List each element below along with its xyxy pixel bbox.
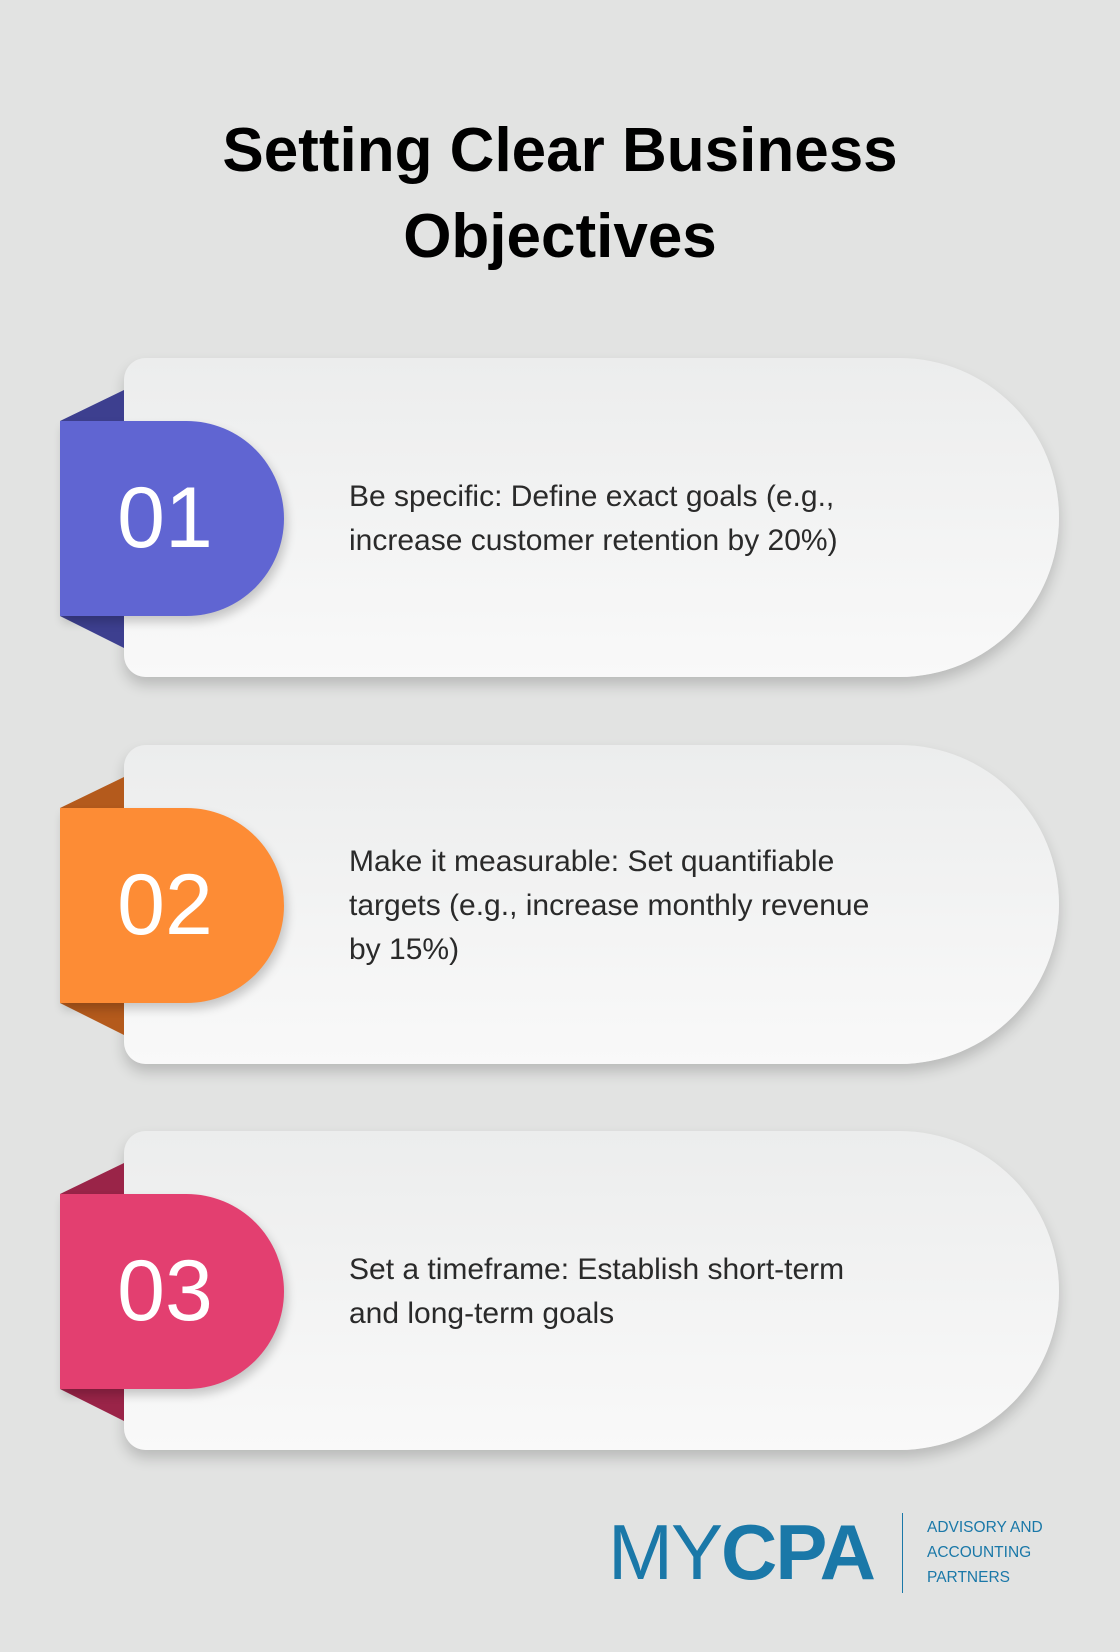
- logo: ACCOUNTING: [927, 1544, 1031, 1561]
- logo: [608, 1508, 1043, 1596]
- badge 02: 02: [117, 857, 213, 953]
- panel: item 1: [59, 358, 1064, 690]
- badge 02: [60, 808, 284, 1003]
- fold 1: [60, 390, 124, 648]
- title: Objectives: [403, 202, 717, 271]
- card 3: [124, 1131, 1059, 1450]
- badge 01: [60, 421, 284, 616]
- fold 2: [60, 777, 124, 1035]
- title: Setting Clear Business: [222, 116, 898, 185]
- panel: item 2: [59, 745, 1064, 1078]
- logo: PARTNERS: [927, 1569, 1010, 1586]
- card 2: [124, 745, 1059, 1064]
- text 1: Be specific: Define exact goals (e.g., increase customer retention by 20%): [349, 480, 838, 557]
- text 3: Set a timeframe: Establish short-term and long-term goals: [349, 1253, 844, 1330]
- title: [222, 116, 898, 271]
- card 1: [124, 358, 1059, 677]
- panel: item 3: [59, 1131, 1064, 1464]
- text 2: Make it measurable: Set quantifiable targets (e.g., increase monthly revenue by 15%): [349, 845, 869, 966]
- badge 03: [60, 1194, 284, 1389]
- badge 01: 01: [117, 470, 213, 566]
- badge 03: 03: [117, 1243, 213, 1339]
- logo: MYCPA: [608, 1508, 874, 1596]
- logo: ADVISORY AND: [927, 1519, 1043, 1536]
- fold 3: [60, 1163, 124, 1421]
